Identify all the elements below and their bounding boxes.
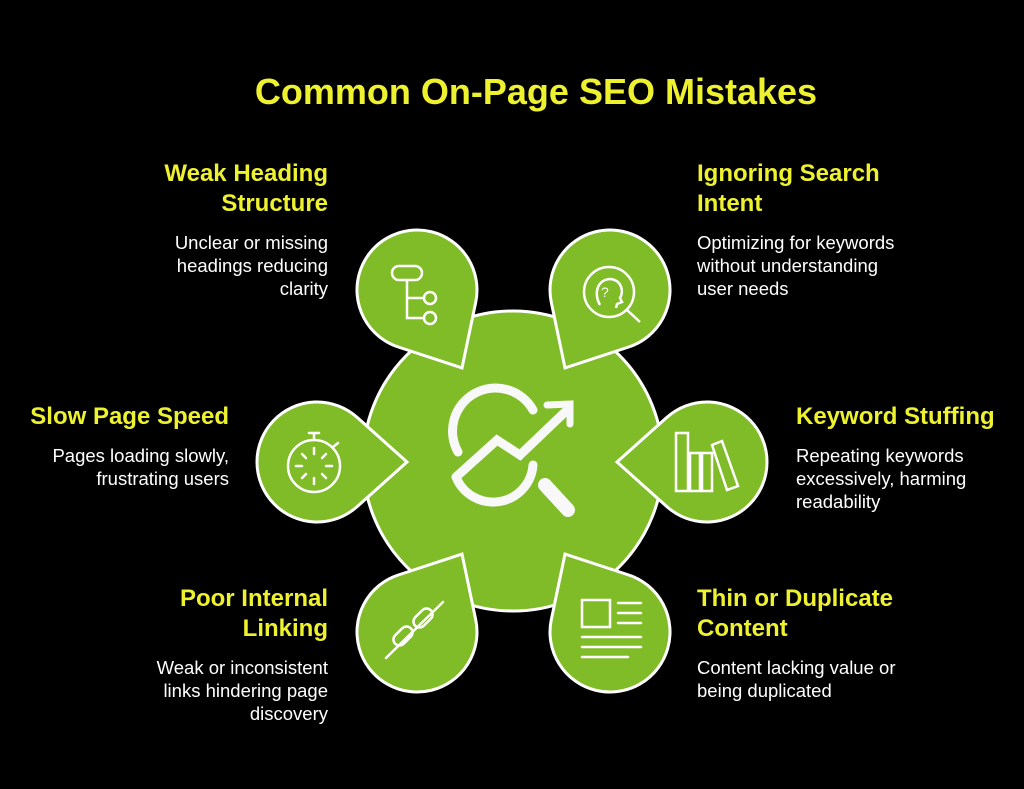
petal: page speed xyxy=(257,402,407,522)
icon: hierarchy xyxy=(392,266,436,324)
text: ignoring search intent: without understanding xyxy=(697,255,878,276)
text: keyword stuffing: excessively, harming xyxy=(796,468,966,489)
icon: central seo chart xyxy=(453,388,570,510)
text: ignoring search intent xyxy=(697,160,894,299)
text: weak heading structure: clarity xyxy=(280,278,328,299)
text: ignoring search intent: Intent xyxy=(697,190,762,217)
text: thin or duplicate content xyxy=(697,585,896,701)
petal: keyword stuffing xyxy=(617,402,767,522)
text: slow page speed: frustrating users xyxy=(96,468,229,489)
text: slow page speed xyxy=(30,403,229,489)
text: ignoring search intent: user needs xyxy=(697,278,789,299)
central circle xyxy=(363,311,663,611)
text: thin or duplicate content: Content lacking value or xyxy=(697,657,895,678)
text: weak heading structure: Structure xyxy=(221,190,328,217)
text: weak heading structure: Unclear or missing xyxy=(175,232,328,253)
text: weak heading structure: Weak Heading xyxy=(164,160,328,187)
icon: head search xyxy=(584,267,640,322)
text: slow page speed: Slow Page Speed xyxy=(30,403,229,430)
icon: head search: ? xyxy=(601,284,609,300)
icon: stopwatch xyxy=(288,433,340,492)
icon: books xyxy=(676,433,738,491)
petal: search intent xyxy=(513,208,692,398)
text: weak heading structure: headings reducing xyxy=(177,255,328,276)
text: ignoring search intent: Ignoring Search xyxy=(697,160,880,187)
text: keyword stuffing: readability xyxy=(796,491,880,512)
petal: weak heading xyxy=(335,208,514,398)
text: keyword stuffing xyxy=(796,403,995,512)
text: slow page speed: Pages loading slowly, xyxy=(52,445,229,466)
text: thin or duplicate content: Content xyxy=(697,615,788,642)
text: keyword stuffing: Repeating keywords xyxy=(796,445,964,466)
text: poor internal linking: discovery xyxy=(250,703,328,724)
text: weak heading structure xyxy=(164,160,328,299)
text: poor internal linking: Linking xyxy=(243,615,328,642)
petal: internal linking xyxy=(335,524,514,714)
petal: thin content xyxy=(513,524,692,714)
icon: chain xyxy=(386,602,443,658)
icon: article xyxy=(582,600,641,657)
text: ignoring search intent: Optimizing for keywords xyxy=(697,232,894,253)
title: Common On-Page SEO Mistakes xyxy=(255,71,817,112)
text: thin or duplicate content: being duplicated xyxy=(697,680,832,701)
text: poor internal linking: Poor Internal xyxy=(180,585,328,612)
text: thin or duplicate content: Thin or Duplicate xyxy=(697,585,893,612)
text: keyword stuffing: Keyword Stuffing xyxy=(796,403,995,430)
text: poor internal linking: Weak or inconsistent xyxy=(157,657,328,678)
text: poor internal linking: links hindering page xyxy=(163,680,328,701)
text: poor internal linking xyxy=(156,585,328,724)
